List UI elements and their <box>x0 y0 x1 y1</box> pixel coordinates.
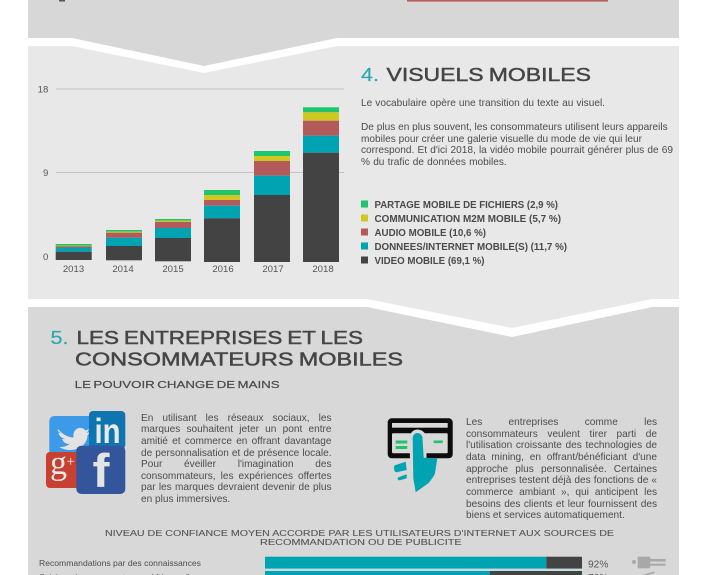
axis labels: 9 <box>43 168 48 179</box>
bar 2016 <box>204 190 240 262</box>
legend: DONNEES/INTERNET MOBILE(S) (11,7 %) <box>374 242 567 253</box>
bar 2015 <box>155 219 191 261</box>
text block: data mining: biens et services automatiquement. <box>466 510 625 521</box>
text block: réseaux sociaux: par les marques devraient devenir de plus <box>141 482 332 493</box>
google plus: g <box>50 445 67 482</box>
text block: visuels intro: % du trafic de données mobiles. <box>361 157 507 168</box>
icon: row 2 <box>642 572 655 575</box>
heading: entreprises et consommateurs mobiles: CONSOMMATEURS MOBILES <box>75 350 403 370</box>
chart title <box>105 528 614 547</box>
text block: réseaux sociaux <box>141 413 332 505</box>
chart title: RECOMMANDATION OU DE PUBLICITE <box>260 537 462 547</box>
text block: visuels intro: Le vocabulaire opère une transition du texte au visuel. <box>361 98 605 109</box>
subheading: LE POUVOIR CHANGE DE MAINS <box>75 379 280 391</box>
icon: social networks <box>46 411 125 497</box>
year labels: 2013 <box>63 264 84 275</box>
stacked bar chart <box>38 84 344 275</box>
icon: row 1 <box>632 557 666 568</box>
heading: entreprises et consommateurs mobiles: LES ENTREPRISES ET LES <box>76 328 363 348</box>
text block: réseaux sociaux: consommateurs, les expériences offertes <box>141 471 332 482</box>
text block: visuels intro: mobiles pour créer une galerie visuelle du mode de vie qui leur <box>361 134 642 144</box>
legend: VIDEO MOBILE (69,1 %) <box>374 256 484 267</box>
facebook: f <box>92 444 110 497</box>
row: opinions <box>39 571 655 575</box>
heading: visuels mobiles: 4. <box>361 64 379 85</box>
axis labels <box>38 84 48 263</box>
legend: AUDIO MOBILE (10,6 %) <box>374 228 486 239</box>
twitter <box>49 416 95 456</box>
heading: entreprises et consommateurs mobiles <box>50 328 403 370</box>
legend: COMMUNICATION M2M MOBILE (5,7 %) <box>374 214 561 225</box>
year labels: 2015 <box>162 264 184 275</box>
bar 2013 <box>56 244 92 260</box>
text block: réseaux sociaux: en plus immersives. <box>141 494 230 505</box>
axis labels: 18 <box>38 84 48 96</box>
text block: data mining: commerce ambiant », qui anticipent les <box>466 487 657 498</box>
heading: entreprises et consommateurs mobiles: 5. <box>50 328 68 348</box>
year labels: 2017 <box>262 264 284 275</box>
panel: previous section <box>28 0 679 66</box>
text block: data mining: l'utilisation croissante des technologies de <box>466 440 657 451</box>
text block: data mining: consommateurs veulent tirer parti de <box>466 429 657 440</box>
panel: entreprises et consommateurs <box>28 307 679 575</box>
google plus: + <box>66 454 75 470</box>
text block: data mining: besoins des clients et leur fournissent des <box>466 499 657 510</box>
year labels: 2016 <box>212 264 234 275</box>
text block: visuels intro: correspond. Et d'ici 2018, la vidéo mobile pourrait générer plus de 69 <box>361 145 673 156</box>
legend: PARTAGE MOBILE DE FICHIERS (2,9 %) <box>374 200 558 211</box>
row: recommandations: Recommandations par des connaissances <box>39 558 201 568</box>
row: recommandations: 92% <box>588 559 608 570</box>
text block: visuels intro: De plus en plus souvent, les consommateurs utilisent leurs appareils <box>361 122 668 133</box>
year labels: 2014 <box>112 264 134 275</box>
chart title: NIVEAU DE CONFIANCE MOYEN ACCORDE PAR LES UTILISATEURS D'INTERNET AUX SOURCES DE <box>105 528 614 538</box>
text block: réseaux sociaux: amitié et commerce en offrant davantage <box>141 436 332 447</box>
text block: data mining: data mining, en offrant/bénéficiant d'une <box>466 452 657 463</box>
trust bar chart <box>39 557 666 575</box>
text block: réseaux sociaux: Pour éveiller l'imagination des <box>141 459 332 470</box>
heading: visuels mobiles: VISUELS MOBILES <box>386 64 591 85</box>
bar 2017 <box>254 151 290 262</box>
axis labels: 0 <box>43 252 48 263</box>
text block: visuels intro <box>361 98 673 168</box>
linkedin: in <box>94 412 120 451</box>
text block: data mining: approche plus personnalisée. Certaines <box>466 464 657 475</box>
text block: réseaux sociaux: de personnalisation et de présence locale. <box>141 448 332 459</box>
icon: cropped glyph <box>59 0 65 2</box>
cropped red bar <box>407 0 608 2</box>
text block: data mining <box>466 417 657 521</box>
year labels: 2018 <box>312 264 334 275</box>
legend <box>361 200 567 267</box>
text block: data mining: Les entreprises comme les <box>466 417 657 428</box>
row: recommandations <box>39 557 666 571</box>
year labels <box>63 264 334 275</box>
bar 2018 <box>303 107 339 262</box>
google plus <box>46 445 82 488</box>
icon: hand on payment card <box>388 418 453 492</box>
text block: data mining: entreprises testent déjà des fonctions de « <box>466 475 657 486</box>
text block: réseaux sociaux: marques souhaitent jeter un pont entre <box>141 424 332 435</box>
bar 2014 <box>106 230 142 260</box>
text block: réseaux sociaux: En utilisant les réseaux sociaux, les <box>141 413 332 424</box>
panel: visuels mobiles <box>28 46 679 328</box>
